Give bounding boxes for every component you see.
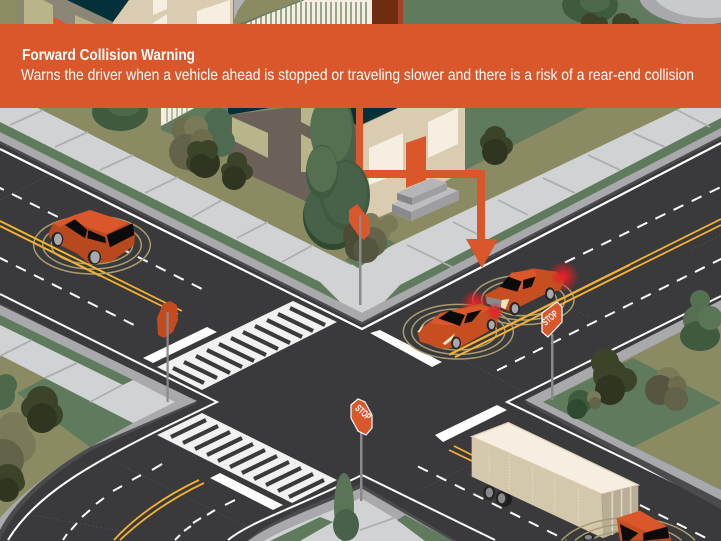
bushes <box>0 374 17 396</box>
stop sign centre: STOP <box>353 402 374 423</box>
thin lane guide lines <box>0 170 721 533</box>
yellow line over rings <box>449 265 637 357</box>
panel: house block top <box>0 0 721 329</box>
car: red sports car and pickup with warning glow <box>403 261 637 359</box>
olive bush by sign <box>343 213 398 263</box>
sidewalk <box>0 325 175 423</box>
sports car <box>417 303 499 349</box>
lawn green plot right of house <box>465 108 587 170</box>
bushes right block <box>567 290 721 419</box>
window cream left <box>369 133 403 185</box>
stop sign right <box>539 302 562 400</box>
cab wheel <box>582 534 594 541</box>
olive lawn <box>0 355 133 518</box>
trailer rear <box>602 485 638 538</box>
semi truck <box>472 423 695 541</box>
tree bottom <box>333 473 359 541</box>
green lawn <box>17 378 133 447</box>
stop sign back top <box>349 204 370 305</box>
dark left wall <box>228 106 356 215</box>
lane dashes upper right <box>497 185 721 370</box>
window left wall <box>232 117 268 158</box>
lane dashes lower right <box>418 466 710 540</box>
crosswalk north <box>157 301 337 390</box>
glow <box>461 289 489 317</box>
house lower part <box>228 106 465 225</box>
car: orange van with rings <box>0 210 150 276</box>
house top left above banner <box>0 0 245 26</box>
tall tree by house <box>303 88 370 250</box>
lane dashes upper left <box>0 185 208 326</box>
yellow centre line upper left <box>0 221 182 314</box>
panel: left block <box>0 294 217 541</box>
small dark bush right lawn <box>480 126 513 165</box>
sidewalk joints <box>10 110 710 267</box>
strip above banner <box>360 0 721 26</box>
panel: right block <box>507 296 721 509</box>
roof sliver <box>312 106 356 125</box>
tail lights <box>486 302 504 321</box>
wheels <box>483 485 495 500</box>
rings pickup <box>473 275 574 325</box>
road markings <box>0 185 721 540</box>
banner <box>0 24 721 108</box>
panel: bottom block <box>228 475 495 541</box>
chimney <box>372 0 403 26</box>
pickup <box>485 268 564 312</box>
stop sign right: STOP <box>539 307 561 328</box>
bush left under banner <box>92 93 148 131</box>
lawn green plot left of house <box>161 108 235 150</box>
yellow curve lower left <box>114 480 204 540</box>
stop bars <box>143 327 507 510</box>
rings cab <box>562 518 695 540</box>
arrow from banner to the car <box>356 106 498 268</box>
window cream right <box>428 108 458 158</box>
cream wall <box>356 106 465 225</box>
lane dashes curve lower left <box>63 464 235 540</box>
cab <box>617 511 672 541</box>
bush group beside fence <box>169 108 253 190</box>
stop sign back left <box>157 301 178 402</box>
heading: Forward Collision Warning <box>22 47 195 64</box>
crosswalk south <box>157 413 337 503</box>
yellow line lower right <box>449 446 472 461</box>
rings sports car <box>403 304 513 359</box>
fence <box>161 0 372 126</box>
bushes above banner <box>562 0 639 33</box>
stop sign centre <box>351 399 374 501</box>
round gray patio <box>638 0 721 25</box>
yellow centre line upper right <box>450 219 721 357</box>
trailer side <box>472 437 603 538</box>
door <box>406 136 426 188</box>
steps <box>392 178 459 221</box>
trailer top <box>472 423 638 494</box>
grass strip <box>0 315 133 385</box>
